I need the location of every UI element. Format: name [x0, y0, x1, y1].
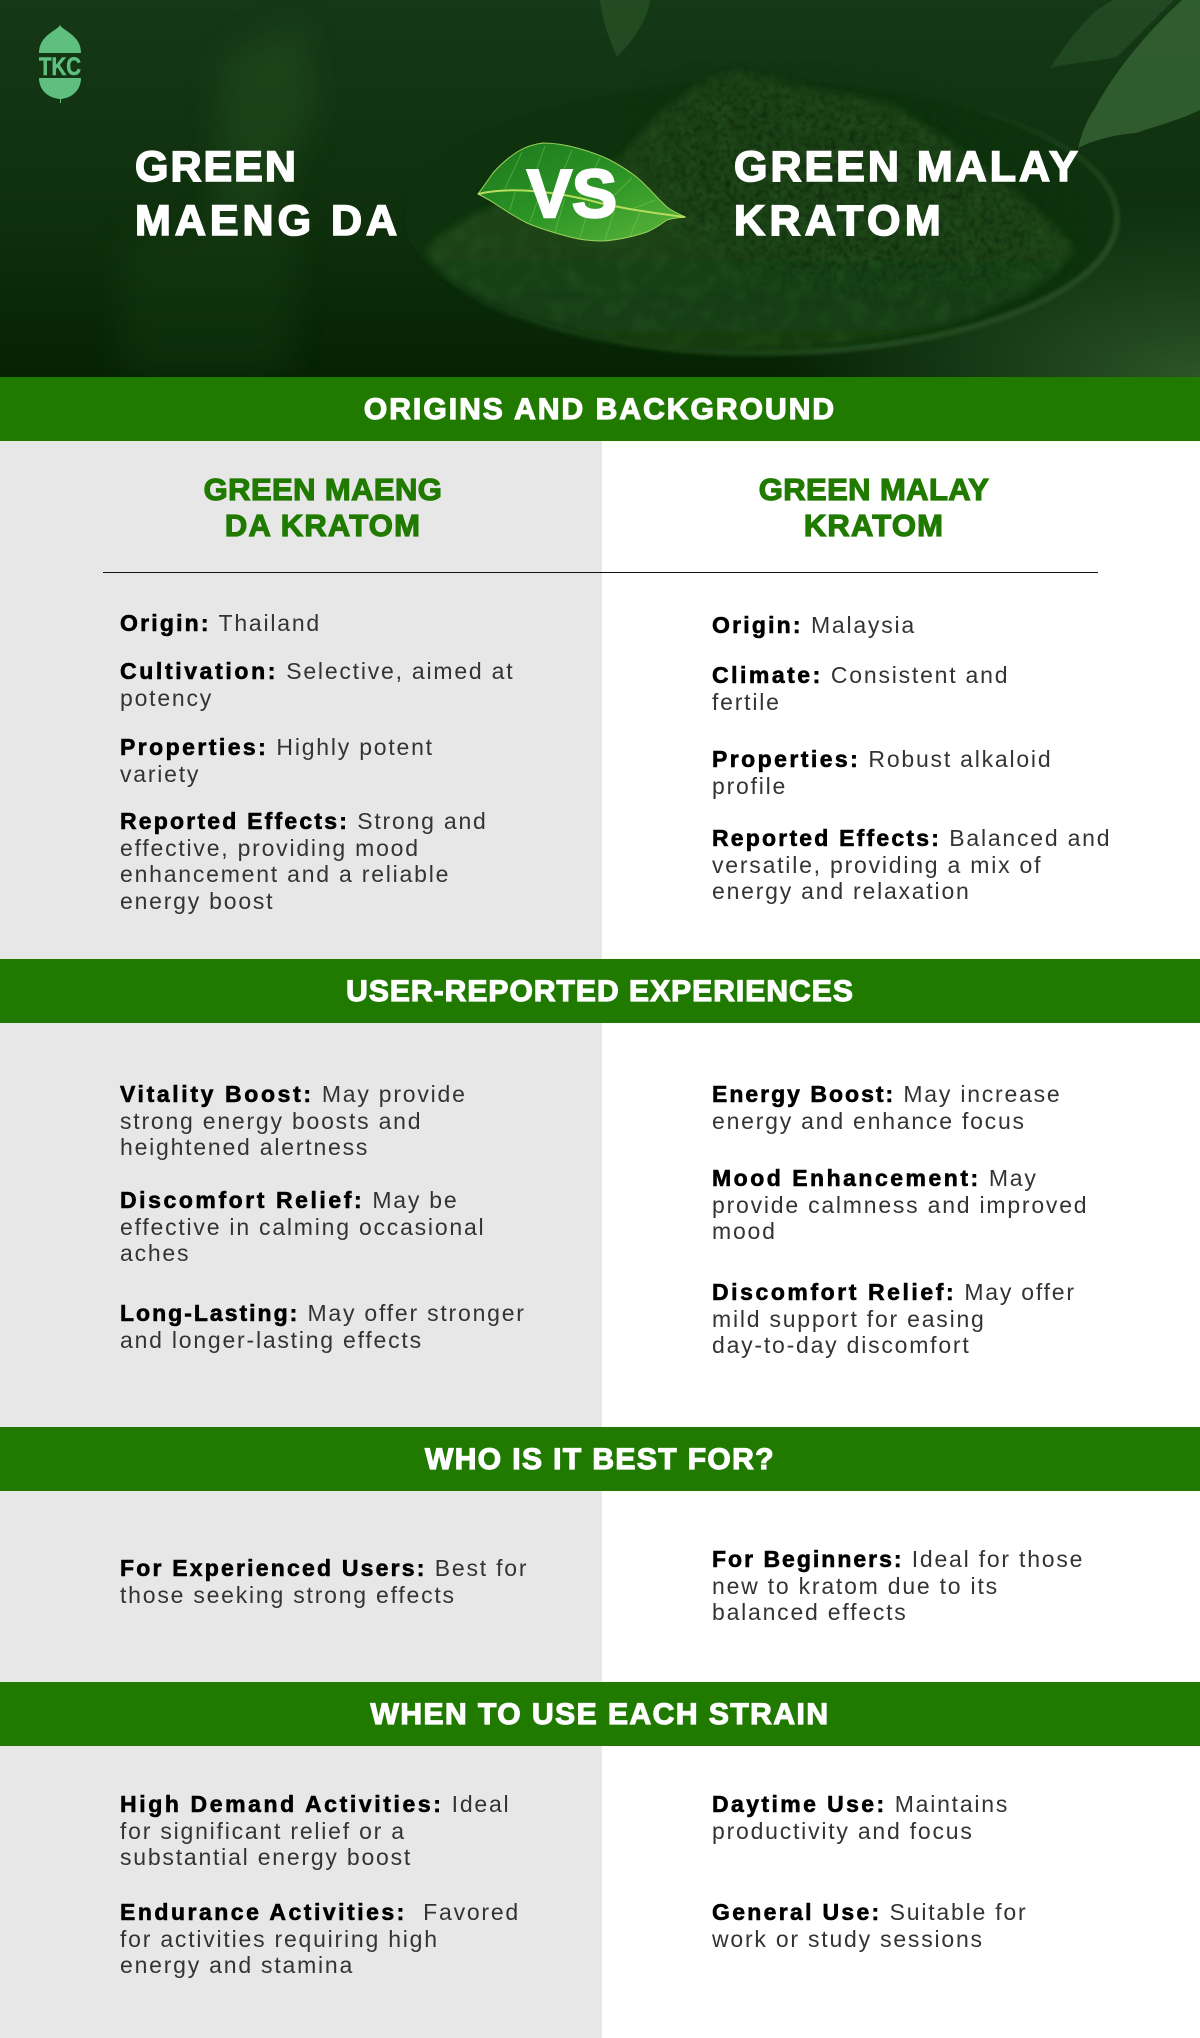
origins right: reported effects: energy and relaxation: [712, 878, 971, 904]
best for right: beginners: [712, 1546, 1084, 1625]
icon: leaf with VS: [477, 142, 686, 242]
title right: [734, 143, 1081, 245]
when left: endurance activities: Endurance Activities: Favored: [120, 1899, 520, 1925]
subheading: green maeng da kratom: DA KRATOM: [225, 508, 421, 543]
when left: high demand activities: [120, 1791, 510, 1870]
best for right: beginners: new to kratom due to its: [712, 1572, 999, 1598]
experiences left: vitality boost: [120, 1081, 467, 1160]
origins right: climate: [712, 662, 1009, 714]
origins left: reported effects: effective, providing mood: [120, 834, 420, 860]
panel: when to use left background: [0, 1746, 602, 2038]
best for left: experienced users: [120, 1555, 528, 1608]
heading: who is it best for: [0, 1427, 1200, 1491]
icon: leaf with VS: VS: [527, 156, 617, 232]
experiences left: discomfort relief: [120, 1187, 485, 1266]
experiences right: discomfort relief: mild support for easing: [712, 1306, 986, 1332]
best for right: beginners: For Beginners: Ideal for those: [712, 1546, 1084, 1572]
origins right: properties: profile: [712, 772, 787, 798]
title right: KRATOM: [734, 197, 945, 245]
subheading: green maeng da kratom: [204, 472, 442, 543]
best for left: experienced users: For Experienced Users: Best for: [120, 1555, 528, 1581]
origins right: climate: Climate: Consistent and: [712, 662, 1009, 688]
title right: GREEN MALAY: [734, 143, 1081, 191]
bowl: [405, 83, 1117, 353]
experiences right: energy boost: [712, 1081, 1062, 1134]
best for left: experienced users: those seeking strong effects: [120, 1582, 456, 1608]
experiences left: discomfort relief: effective in calming occasional: [120, 1214, 485, 1240]
when left: endurance activities: for activities requiring high: [120, 1926, 439, 1952]
subheading: green maeng da kratom: GREEN MAENG: [204, 472, 442, 507]
experiences left: vitality boost: strong energy boosts and: [120, 1108, 422, 1134]
experiences right: mood enhancement: [712, 1165, 1088, 1244]
subheading: green malay kratom: KRATOM: [804, 508, 944, 543]
header banner background: [0, 0, 1200, 377]
origins right: properties: [712, 746, 1052, 799]
when left: high demand activities: substantial energy boost: [120, 1844, 412, 1870]
heading: origins and background: ORIGINS AND BACKGROUND: [364, 393, 836, 426]
origins left: reported effects: energy boost: [120, 888, 274, 914]
origins left: properties: Properties: Highly potent: [120, 734, 434, 760]
when right: general use: [712, 1899, 1027, 1952]
experiences left: long-lasting: Long-Lasting: May offer stronger: [120, 1300, 526, 1326]
experiences left: long-lasting: and longer-lasting effects: [120, 1326, 423, 1352]
experiences right: energy boost: energy and enhance focus: [712, 1108, 1026, 1134]
origins right: origin: Origin: Malaysia: [712, 612, 916, 638]
blurred background stalk: [120, 20, 320, 377]
heading: user-reported experiences: [0, 959, 1200, 1023]
origins left: cultivation: potency: [120, 684, 213, 710]
experiences right: discomfort relief: [712, 1279, 1076, 1358]
panel: origins left background: [0, 441, 602, 959]
origins right: reported effects: [712, 825, 1111, 904]
origins left: properties: variety: [120, 760, 200, 786]
title left: GREEN: [135, 143, 298, 191]
when left: endurance activities: energy and stamina: [120, 1952, 354, 1978]
experiences right: mood enhancement: Mood Enhancement: May: [712, 1165, 1038, 1191]
when left: high demand activities: High Demand Activities: Ideal: [120, 1791, 510, 1817]
when right: daytime use: [712, 1791, 1009, 1844]
when right: daytime use: Daytime Use: Maintains: [712, 1791, 1009, 1817]
when right: daytime use: productivity and focus: [712, 1818, 974, 1844]
experiences left: long-lasting: [120, 1300, 526, 1353]
origins left: cultivation: [120, 658, 514, 711]
experiences right: mood enhancement: provide calmness and improved: [712, 1192, 1088, 1218]
origins left: cultivation: Cultivation: Selective, aimed at: [120, 658, 514, 684]
subheading: green malay kratom: GREEN MALAY: [759, 472, 989, 507]
experiences right: energy boost: Energy Boost: May increase: [712, 1081, 1062, 1107]
experiences left: discomfort relief: aches: [120, 1240, 190, 1266]
panel: experiences left background: [0, 1023, 602, 1427]
subheading: green malay kratom: [759, 472, 990, 543]
experiences left: vitality boost: Vitality Boost: May provide: [120, 1081, 467, 1107]
best for right: beginners: balanced effects: [712, 1599, 908, 1625]
heading: when to use each strain: WHEN TO USE EACH STRAIN: [371, 1698, 829, 1731]
when left: high demand activities: for significant relief or a: [120, 1818, 406, 1844]
experiences left: discomfort relief: Discomfort Relief: May be: [120, 1187, 458, 1213]
origins right: climate: fertile: [712, 688, 781, 714]
when right: general use: General Use: Suitable for: [712, 1899, 1027, 1925]
experiences right: discomfort relief: Discomfort Relief: May offer: [712, 1279, 1076, 1305]
origins left: origin: Origin: Thailand: [120, 610, 321, 636]
logo: TKC leaf: TKC: [39, 53, 81, 81]
origins right: reported effects: versatile, providing a mix of: [712, 852, 1042, 878]
title left: [135, 143, 401, 245]
experiences left: vitality boost: heightened alertness: [120, 1134, 369, 1160]
heading: user-reported experiences: USER-REPORTED EXPERIENCES: [346, 975, 854, 1008]
heading: who is it best for: WHO IS IT BEST FOR?: [425, 1443, 775, 1476]
origins left: reported effects: Reported Effects: Strong and: [120, 808, 488, 834]
logo: TKC leaf: [39, 25, 81, 103]
heading: origins and background: [0, 377, 1200, 441]
when left: endurance activities: [120, 1899, 520, 1978]
origins right: reported effects: Reported Effects: Balanced and: [712, 825, 1111, 851]
when right: general use: work or study sessions: [712, 1926, 984, 1952]
experiences right: mood enhancement: mood: [712, 1218, 777, 1244]
origins right: properties: Properties: Robust alkaloid: [712, 746, 1052, 772]
origins left: properties: [120, 734, 434, 787]
origins left: reported effects: enhancement and a reliable: [120, 861, 450, 887]
experiences right: discomfort relief: day-to-day discomfort: [712, 1332, 971, 1358]
heading: when to use each strain: [0, 1682, 1200, 1746]
powder pile: [427, 72, 1072, 354]
origins left: reported effects: [120, 808, 488, 914]
title left: MAENG DA: [135, 197, 401, 245]
panel: best for left background: [0, 1491, 602, 1682]
leaves top right: [600, 0, 1200, 148]
